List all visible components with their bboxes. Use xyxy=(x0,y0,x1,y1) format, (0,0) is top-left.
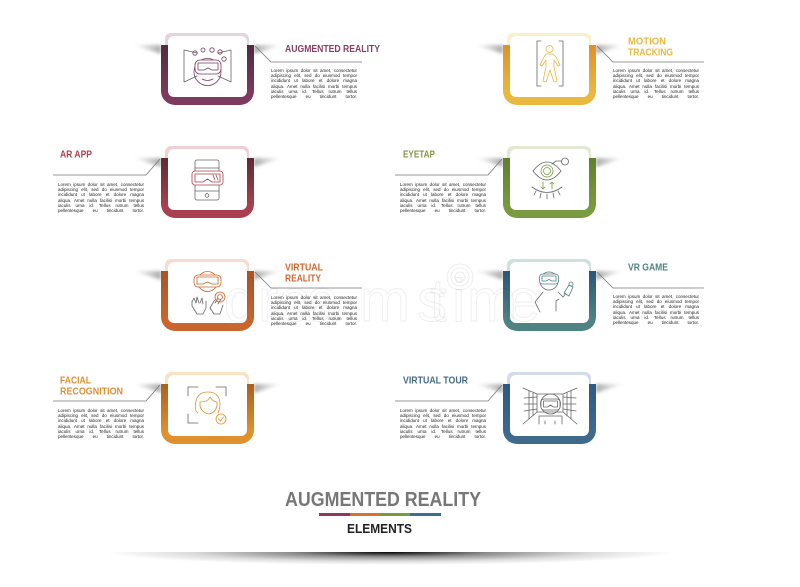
text block: pellentesque eu tincidunt tortor. xyxy=(400,208,486,213)
heading: REALITY xyxy=(285,274,321,284)
text block xyxy=(613,68,699,99)
heading xyxy=(628,36,673,58)
leader line xyxy=(53,159,160,175)
card xyxy=(133,372,282,444)
text block: incididunt ut labore et dolore magna xyxy=(58,418,144,423)
icon: phone with headset xyxy=(192,160,223,200)
leader line xyxy=(597,46,704,62)
text block: adipiscing elit, sed do eiusmod tempor xyxy=(58,413,144,418)
icon: AR headset with floating objects xyxy=(184,48,231,86)
text block: Lorem ipsum dolor sit amet, consectetur xyxy=(613,68,699,73)
heading xyxy=(60,376,123,398)
text block: pellentesque eu tincidunt tortor. xyxy=(400,434,486,439)
leader line xyxy=(53,385,160,401)
text block: iaculis urna id. Tellus rutrum tellus xyxy=(271,316,357,321)
text block: adipiscing elit, sed do eiusmod tempor xyxy=(271,300,357,305)
card xyxy=(475,259,624,331)
colour bar xyxy=(319,513,441,516)
panel: augmented reality xyxy=(140,33,380,105)
heading: VR GAME xyxy=(628,262,668,274)
icon: face in scan frame xyxy=(188,387,226,424)
heading: VIRTUAL xyxy=(285,262,323,274)
text block: Lorem ipsum dolor sit amet, consectetur xyxy=(271,295,357,300)
text block: iaculis urna id. Tellus rutrum tellus xyxy=(271,89,357,94)
leader line xyxy=(395,385,502,401)
text block xyxy=(271,295,357,326)
card xyxy=(475,146,624,218)
text block: Lorem ipsum dolor sit amet, consectetur xyxy=(400,182,486,187)
text block: incididunt ut labore et dolore magna xyxy=(271,78,357,83)
text block: aliqua. Amet nulla facilisi morbi tempus xyxy=(613,84,699,89)
leader line xyxy=(255,272,362,288)
card xyxy=(475,372,624,444)
text block: incididunt ut labore et dolore magna xyxy=(400,418,486,423)
text block: adipiscing elit, sed do eiusmod tempor xyxy=(271,73,357,78)
text block: incididunt ut labore et dolore magna xyxy=(58,192,144,197)
text block: incididunt ut labore et dolore magna xyxy=(613,304,699,309)
panel: eyetap xyxy=(395,146,618,218)
heading xyxy=(285,262,323,284)
text block: aliqua. Amet nulla facilisi morbi tempus xyxy=(400,424,486,429)
panel: ar app xyxy=(53,146,276,218)
heading: RECOGNITION xyxy=(60,386,123,398)
icon: eye with arrows xyxy=(532,158,568,199)
text block: pellentesque eu tincidunt tortor. xyxy=(271,94,357,99)
text block: aliqua. Amet nulla facilisi morbi tempus xyxy=(400,198,486,203)
card xyxy=(475,33,624,105)
text block: pellentesque eu tincidunt tortor. xyxy=(271,321,357,326)
heading: FACIAL xyxy=(60,376,91,386)
panel: virtual tour xyxy=(395,372,618,444)
text block: iaculis urna id. Tellus rutrum tellus xyxy=(58,203,144,208)
text block: iaculis urna id. Tellus rutrum tellus xyxy=(613,89,699,94)
icon: virtual room with headset xyxy=(523,388,577,424)
heading: AUGMENTED REALITY xyxy=(285,44,380,55)
heading: TRACKING xyxy=(628,48,673,58)
text block: incididunt ut labore et dolore magna xyxy=(271,305,357,310)
text block: aliqua. Amet nulla facilisi morbi tempus xyxy=(58,424,144,429)
text block: aliqua. Amet nulla facilisi morbi tempus xyxy=(58,198,144,203)
floor shadow xyxy=(100,552,680,566)
heading: VIRTUAL TOUR xyxy=(403,376,469,386)
icon: player with controller xyxy=(535,272,573,312)
subtitle: ELEMENTS xyxy=(347,521,412,536)
text block xyxy=(58,408,144,439)
text block: iaculis urna id. Tellus rutrum tellus xyxy=(613,315,699,320)
text block xyxy=(400,182,486,213)
panel: facial recognition xyxy=(53,372,276,444)
text block: Lorem ipsum dolor sit amet, consectetur xyxy=(400,408,486,413)
card xyxy=(133,259,282,331)
text block: adipiscing elit, sed do eiusmod tempor xyxy=(613,73,699,78)
panel: vr game xyxy=(482,259,704,331)
text block xyxy=(613,294,699,325)
text block xyxy=(400,408,486,439)
text block: adipiscing elit, sed do eiusmod tempor xyxy=(400,413,486,418)
title block xyxy=(285,489,482,536)
text block: adipiscing elit, sed do eiusmod tempor xyxy=(58,187,144,192)
text block: iaculis urna id. Tellus rutrum tellus xyxy=(400,429,486,434)
text block: iaculis urna id. Tellus rutrum tellus xyxy=(58,429,144,434)
leader line xyxy=(395,159,502,175)
text block: Lorem ipsum dolor sit amet, consectetur xyxy=(58,408,144,413)
icon: body in tracking frame xyxy=(537,41,563,86)
text block: Lorem ipsum dolor sit amet, consectetur xyxy=(58,182,144,187)
panel: motion tracking xyxy=(482,33,704,105)
leader line xyxy=(255,46,362,62)
text block: aliqua. Amet nulla facilisi morbi tempus xyxy=(271,84,357,89)
text block: pellentesque eu tincidunt tortor. xyxy=(58,208,144,213)
text block xyxy=(271,68,357,99)
text block: aliqua. Amet nulla facilisi morbi tempus xyxy=(613,310,699,315)
text block: pellentesque eu tincidunt tortor. xyxy=(58,434,144,439)
text block: incididunt ut labore et dolore magna xyxy=(400,192,486,197)
heading: MOTION xyxy=(628,36,666,48)
card xyxy=(133,33,282,105)
text block xyxy=(58,182,144,213)
text block: adipiscing elit, sed do eiusmod tempor xyxy=(400,187,486,192)
panel: virtual reality xyxy=(140,259,362,331)
text block: Lorem ipsum dolor sit amet, consectetur xyxy=(271,68,357,73)
text block: adipiscing elit, sed do eiusmod tempor xyxy=(613,299,699,304)
text block: pellentesque eu tincidunt tortor. xyxy=(613,320,699,325)
icon: headset, hands and target xyxy=(192,272,225,314)
card xyxy=(133,146,282,218)
text block: aliqua. Amet nulla facilisi morbi tempus xyxy=(271,311,357,316)
text block: incididunt ut labore et dolore magna xyxy=(613,78,699,83)
text block: iaculis urna id. Tellus rutrum tellus xyxy=(400,203,486,208)
heading: EYETAP xyxy=(403,150,435,160)
text block: Lorem ipsum dolor sit amet, consectetur xyxy=(613,294,699,299)
leader line xyxy=(597,272,704,288)
heading: AR APP xyxy=(60,150,92,160)
text block: pellentesque eu tincidunt tortor. xyxy=(613,94,699,99)
